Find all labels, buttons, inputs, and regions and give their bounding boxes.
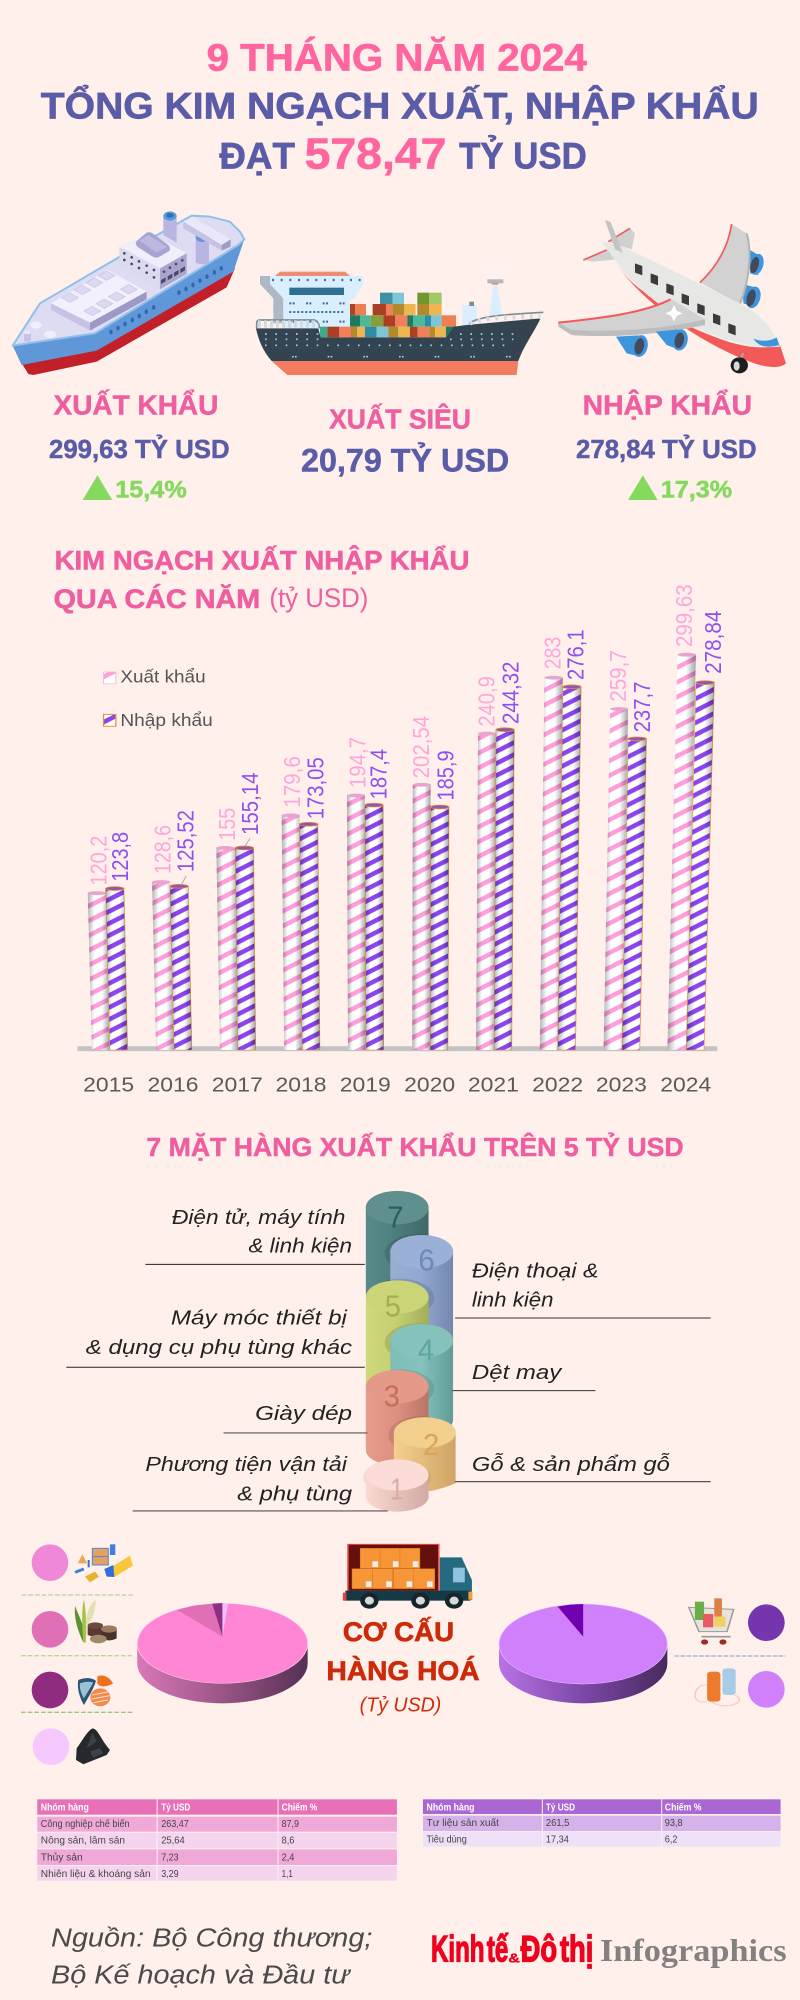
label: máy móc: Máy móc thiết bị bbox=[171, 1308, 348, 1329]
cylinder 2 bbox=[388, 1416, 456, 1491]
heading: cơ cấu hàng hoá bbox=[327, 1616, 480, 1716]
title: 9 THÁNG NĂM 2024 bbox=[207, 36, 587, 79]
bars 2023 bbox=[604, 650, 656, 1050]
label: giày dép: Giày dép bbox=[255, 1403, 352, 1425]
bars 2021 bbox=[474, 662, 524, 1050]
summary: xuất siêu bbox=[301, 404, 509, 478]
table: import structure: Nhóm hàng bbox=[427, 1801, 475, 1813]
legend bbox=[104, 667, 213, 730]
cylinder 7: 7 bbox=[387, 1200, 404, 1234]
engines behind wing bbox=[743, 250, 766, 310]
year axis labels: 2019 bbox=[340, 1074, 391, 1096]
summary: xuất khẩu: 299,63 TỶ USD bbox=[49, 435, 230, 464]
table: import structure: Tỷ USD bbox=[546, 1801, 575, 1813]
bars 2016 bbox=[150, 810, 199, 1050]
heading: cơ cấu hàng hoá: HÀNG HOÁ bbox=[327, 1655, 480, 1686]
title bbox=[41, 36, 759, 178]
table: export structure: Công nghiệp chế biến bbox=[41, 1818, 130, 1829]
year axis labels: 2016 bbox=[147, 1074, 198, 1096]
icon: seafood bbox=[78, 1675, 113, 1706]
year axis labels: 2023 bbox=[596, 1074, 647, 1096]
bars 2020: 202,54 bbox=[409, 716, 435, 778]
cylinder 7 bbox=[366, 1191, 429, 1309]
cylinder 5 bbox=[366, 1279, 434, 1399]
bars 2017 bbox=[215, 773, 264, 1050]
label: phương tiện bbox=[133, 1454, 388, 1511]
bars 2018: 179,6 bbox=[280, 756, 306, 808]
cylinder stack bbox=[363, 1191, 456, 1512]
table: export structure bbox=[37, 1799, 397, 1881]
table: export structure: 263,47 bbox=[161, 1818, 189, 1829]
bars 2021: 244,32 bbox=[498, 662, 524, 724]
bars 2022: 283 bbox=[540, 637, 566, 669]
year axis labels: 2024 bbox=[660, 1074, 711, 1096]
bars 2016: 125,52 bbox=[173, 810, 199, 872]
bars 2015 bbox=[86, 832, 134, 1050]
pie chart: export structure bbox=[137, 1603, 308, 1703]
source note bbox=[51, 1924, 372, 1990]
logo: Kinh tế & Đô thị Infographics: Đô thị bbox=[521, 1928, 593, 1970]
heading: chart: QUA CÁC NĂM bbox=[54, 583, 260, 614]
legend: Xuất khẩu bbox=[120, 667, 206, 687]
cylinder 3 bbox=[366, 1369, 434, 1466]
bars 2016: 128,6 bbox=[150, 825, 176, 874]
summary: xuất khẩu: XUẤT KHẨU bbox=[54, 390, 218, 420]
legend: import categories bbox=[674, 1598, 786, 1708]
table: import structure: Chiếm % bbox=[665, 1801, 702, 1813]
year axis labels: 2018 bbox=[276, 1074, 327, 1096]
label: điện thoại bbox=[455, 1261, 711, 1318]
year axis labels: 2017 bbox=[212, 1074, 263, 1096]
containers bbox=[320, 293, 456, 337]
cylinder 5: 5 bbox=[385, 1290, 401, 1324]
label: điện tử bbox=[145, 1207, 365, 1264]
legend: export categories bbox=[21, 1544, 133, 1765]
icon: delivery truck bbox=[343, 1544, 472, 1609]
table: export structure: Nhóm hàng bbox=[41, 1801, 89, 1813]
table: export structure: 1,1 bbox=[282, 1868, 293, 1879]
cylinder 2: 2 bbox=[423, 1428, 439, 1462]
cylinder 1: 1 bbox=[390, 1472, 404, 1506]
table: export structure: Thủy sản bbox=[41, 1851, 83, 1863]
table: export structure: Nhiên liệu & khoáng sản bbox=[41, 1868, 151, 1879]
icon: industry logistics bbox=[74, 1544, 133, 1582]
bars 2018: 173,05 bbox=[303, 757, 329, 819]
cylinder 3: 3 bbox=[384, 1380, 400, 1414]
year axis labels: 2022 bbox=[532, 1074, 583, 1096]
year axis labels: 2015 bbox=[83, 1074, 134, 1096]
bars 2022 bbox=[540, 629, 589, 1050]
icon: shopping cart bbox=[689, 1598, 734, 1645]
bars 2017: 155 bbox=[215, 808, 241, 841]
bars 2020: 185,9 bbox=[433, 750, 459, 801]
table: import structure: Tư liệu sản xuất bbox=[427, 1817, 499, 1828]
bars 2023: 259,7 bbox=[606, 650, 632, 702]
icon: container ship bbox=[256, 267, 543, 375]
table: import structure: 261,5 bbox=[546, 1817, 569, 1828]
bars 2019: 194,7 bbox=[345, 737, 371, 788]
cylinder 4: 4 bbox=[418, 1334, 434, 1368]
table: import structure: 6,2 bbox=[665, 1833, 678, 1845]
summary: xuất siêu: 20,79 TỶ USD bbox=[301, 443, 509, 478]
cylinder 6: 6 bbox=[418, 1244, 435, 1278]
cylinder 6 bbox=[385, 1234, 453, 1356]
title: TỶ USD bbox=[459, 134, 587, 177]
bars 2015: 123,8 bbox=[108, 832, 134, 882]
table: export structure: 25,64 bbox=[161, 1834, 185, 1846]
title: ĐẠT bbox=[219, 136, 295, 177]
source note: Nguồn: Bộ Công thương; bbox=[51, 1924, 372, 1953]
bars 2017: 155,14 bbox=[238, 773, 264, 835]
icon: cargo ship export bbox=[13, 211, 244, 375]
icon: rice and logs bbox=[75, 1599, 117, 1643]
legend: Nhập khẩu bbox=[120, 711, 213, 730]
heading: cơ cấu hàng hoá: (Tỷ USD) bbox=[360, 1695, 441, 1716]
logo: Kinh tế & Đô thị Infographics bbox=[431, 1928, 787, 1970]
year axis labels: 2021 bbox=[468, 1074, 519, 1096]
table: import structure: 17,34 bbox=[546, 1833, 569, 1845]
label: phương tiện: Phương tiện vận tải bbox=[145, 1454, 348, 1476]
year axis labels: 2020 bbox=[404, 1074, 455, 1096]
bars 2024 bbox=[667, 584, 727, 1050]
logo: Kinh tế & Đô thị Infographics: Kinh tế bbox=[431, 1928, 508, 1970]
bars 2019 bbox=[345, 737, 392, 1050]
bars 2019: 187,4 bbox=[366, 749, 392, 799]
summary: nhập khẩu bbox=[576, 390, 757, 503]
label: điện tử: & linh kiện bbox=[248, 1236, 352, 1257]
table: import structure: Tiêu dùng bbox=[427, 1833, 467, 1845]
table: export structure: 8,6 bbox=[282, 1834, 294, 1846]
label: điện thoại: linh kiện bbox=[472, 1290, 554, 1311]
heading: chart: KIM NGẠCH XUẤT NHẬP KHẨU bbox=[55, 545, 469, 576]
label: gỗ: Gỗ & sản phẩm gỗ bbox=[472, 1453, 670, 1476]
label: phương tiện: & phụ tùng bbox=[237, 1483, 353, 1505]
table: export structure: 7,23 bbox=[161, 1851, 179, 1863]
bars 2024: 278,84 bbox=[701, 611, 727, 674]
summary: xuất siêu: XUẤT SIÊU bbox=[329, 404, 471, 435]
source note: Bộ Kế hoạch và Đầu tư bbox=[51, 1961, 352, 1990]
table: export structure: 2,4 bbox=[282, 1851, 294, 1863]
cylinder labels bbox=[66, 1207, 711, 1511]
bars 2020 bbox=[409, 716, 459, 1050]
bar chart bbox=[78, 584, 727, 1096]
icon: thread spools bbox=[695, 1668, 739, 1706]
bars 2022: 276,1 bbox=[563, 629, 589, 680]
label: điện thoại: Điện thoại & bbox=[472, 1261, 598, 1282]
bars 2021: 240,9 bbox=[474, 676, 500, 727]
logo: Kinh tế & Đô thị Infographics: Infographics bbox=[600, 1933, 787, 1968]
bars 2015: 120,2 bbox=[86, 836, 112, 885]
label: máy móc bbox=[66, 1308, 365, 1367]
icon: coal bbox=[76, 1728, 110, 1764]
table: export structure: Nông sản, lâm sản bbox=[41, 1834, 125, 1846]
label: máy móc: & dụng cụ phụ tùng khác bbox=[86, 1337, 352, 1359]
table: export structure: 87,9 bbox=[282, 1818, 299, 1829]
summary: nhập khẩu: 17,3% bbox=[661, 476, 732, 503]
bars 2018 bbox=[280, 756, 329, 1050]
title: 578,47 bbox=[305, 130, 446, 178]
logo: Kinh tế & Đô thị Infographics: & bbox=[508, 1952, 520, 1966]
year axis labels bbox=[83, 1074, 711, 1096]
bars 2024: 299,63 bbox=[671, 584, 697, 647]
table: export structure: Tỷ USD bbox=[161, 1801, 190, 1813]
summary: xuất khẩu bbox=[49, 390, 230, 503]
pie chart: import structure bbox=[499, 1604, 667, 1703]
table: import structure: 93,8 bbox=[665, 1817, 683, 1828]
summary: xuất khẩu: 15,4% bbox=[115, 476, 187, 503]
cylinder 4 bbox=[385, 1323, 453, 1436]
label: dệt may: Dệt may bbox=[472, 1362, 563, 1384]
table: import structure bbox=[423, 1799, 781, 1847]
heading: chart bbox=[54, 545, 469, 614]
heading: chart: (tỷ USD) bbox=[269, 583, 368, 613]
label: điện tử: Điện tử, máy tính bbox=[172, 1207, 345, 1229]
cylinder 1 bbox=[363, 1459, 431, 1512]
table: export structure: 3,29 bbox=[161, 1868, 179, 1879]
bars 2023: 237,7 bbox=[630, 681, 656, 732]
table: export structure: Chiếm % bbox=[282, 1801, 318, 1813]
heading: cơ cấu hàng hoá: CƠ CẤU bbox=[343, 1616, 454, 1647]
icon: airplane bbox=[558, 220, 786, 373]
